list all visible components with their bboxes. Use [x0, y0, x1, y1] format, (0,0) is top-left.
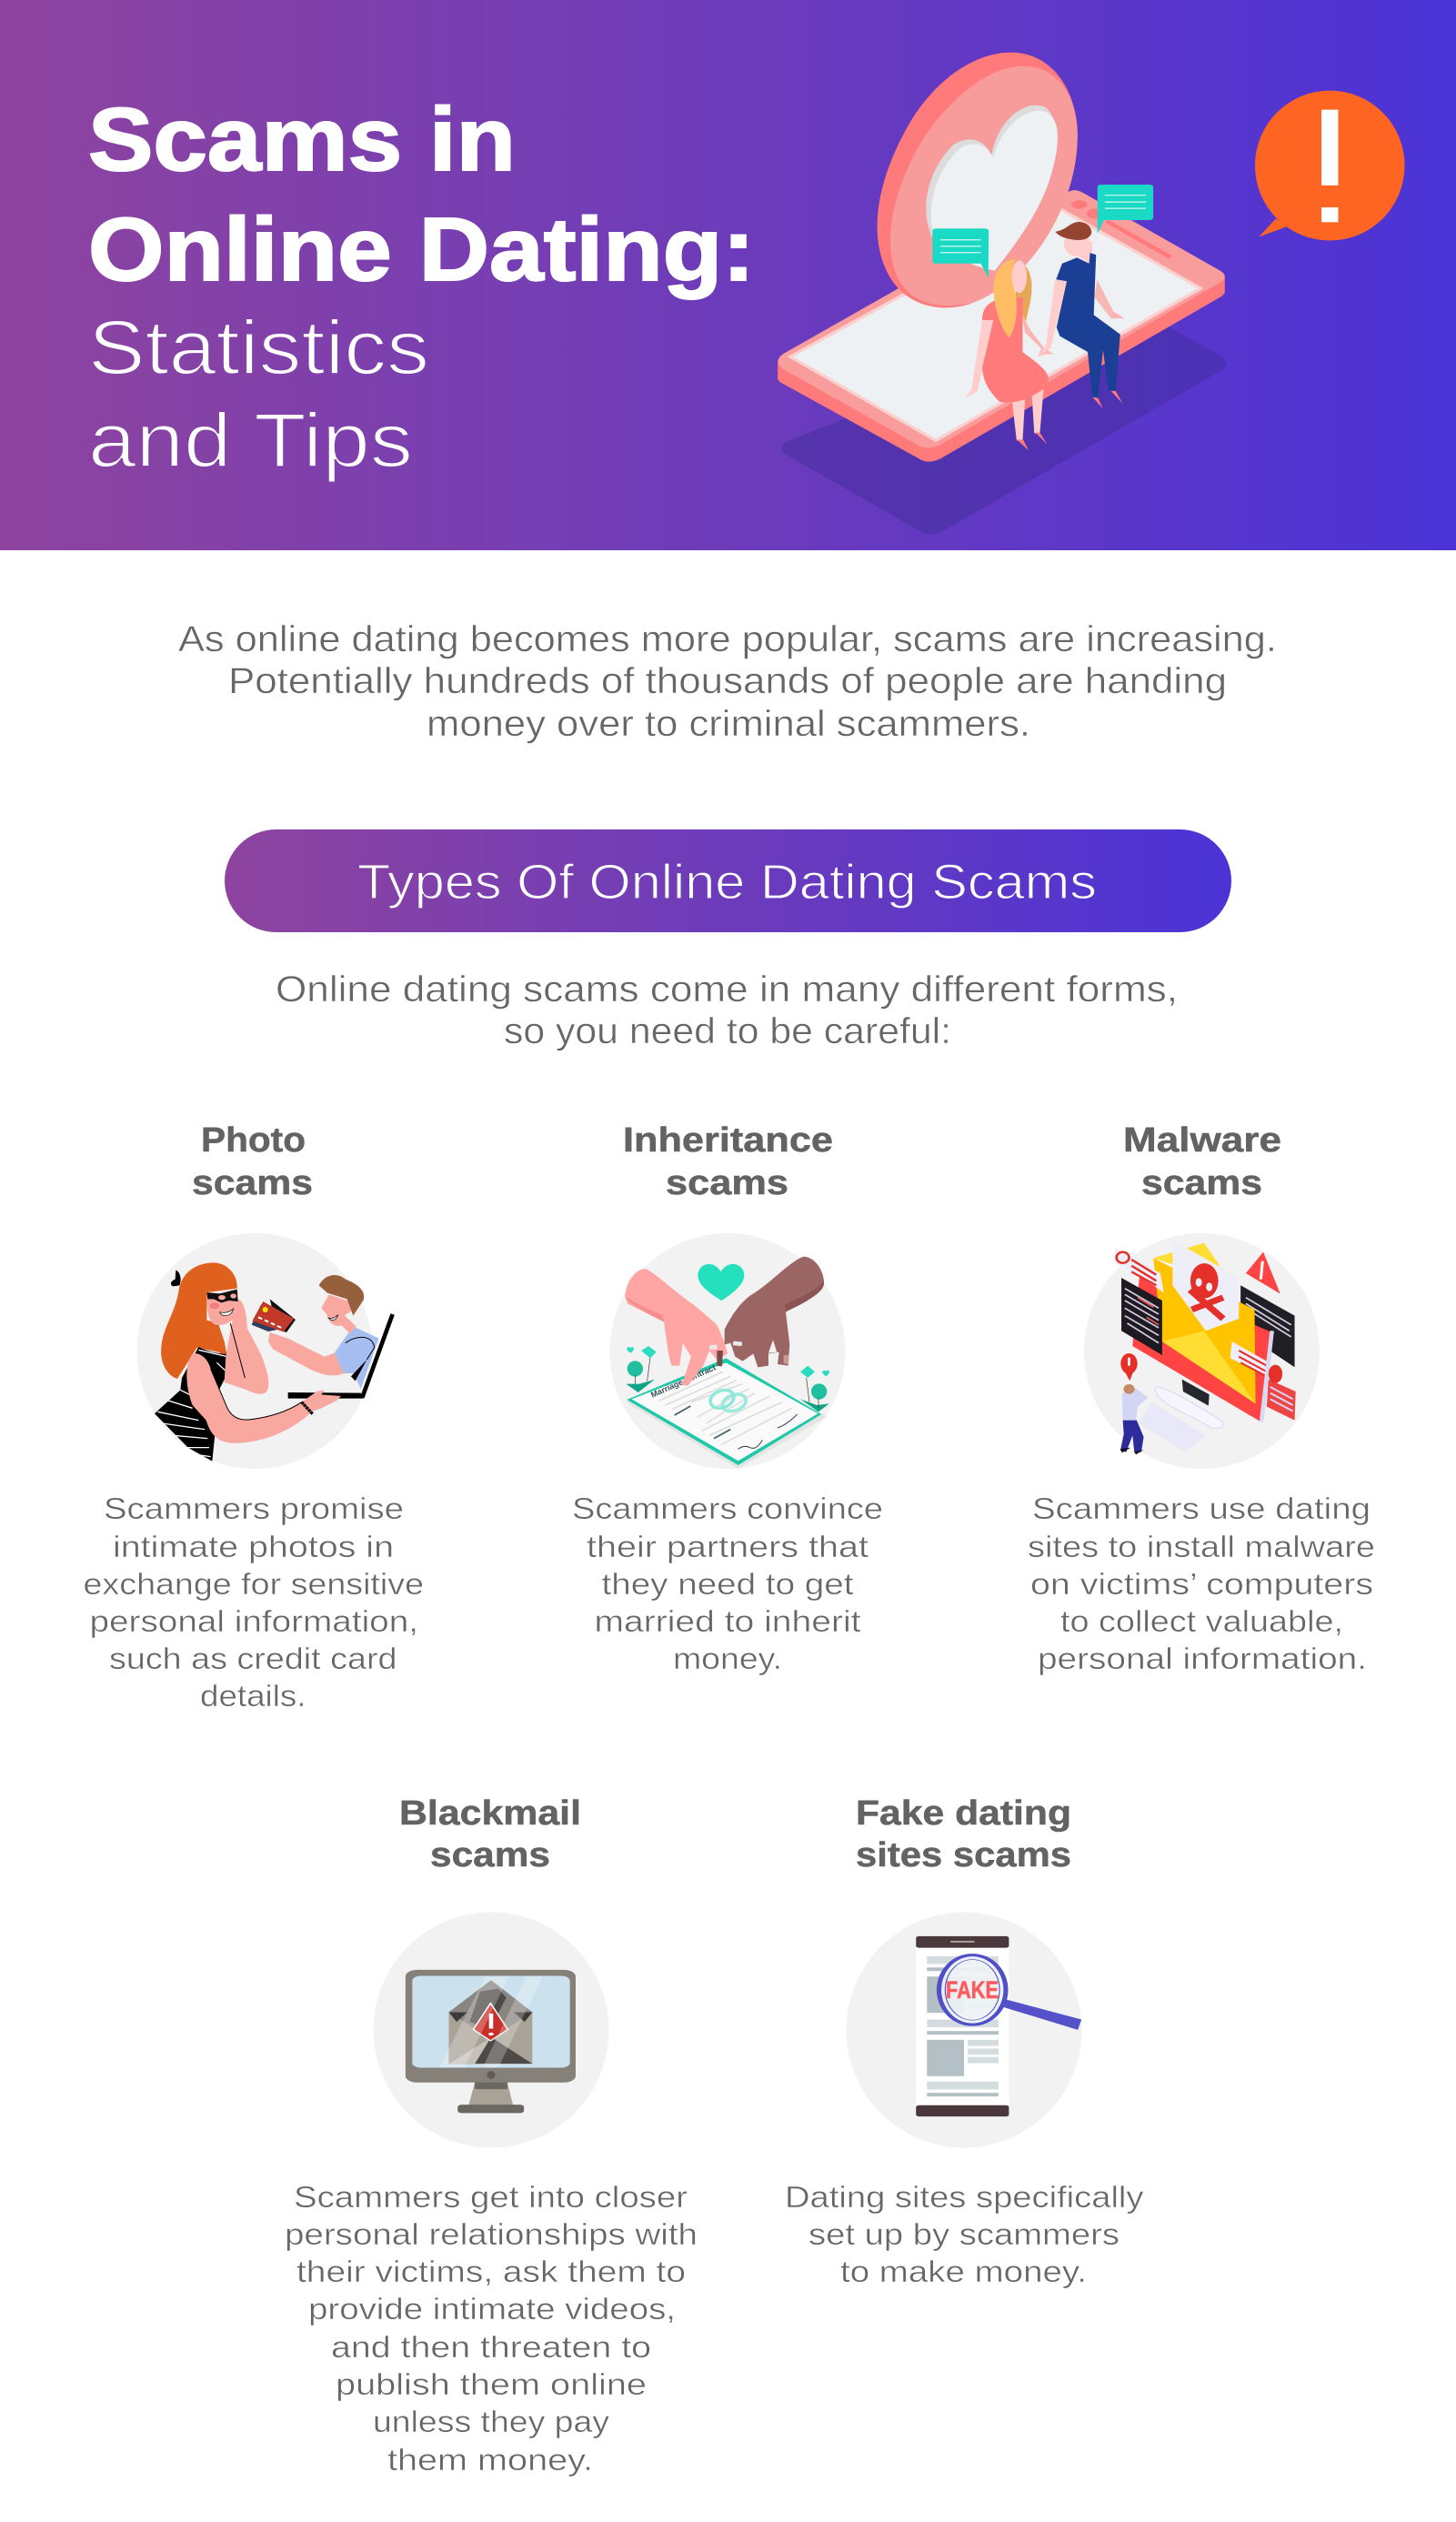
- title: [88, 89, 755, 483]
- text: malware scams description: Scammers use dating: [1032, 1492, 1371, 1525]
- panel: photo scams: [84, 1121, 424, 1713]
- text: malware scams description: to collect valuable,: [1060, 1604, 1343, 1638]
- text: photo scams description: personal information,: [89, 1604, 418, 1638]
- text: photo scams description: such as credit card: [109, 1642, 397, 1675]
- text: blackmail scams description: [285, 2180, 698, 2477]
- intro paragraph: [178, 619, 1277, 744]
- heading: blackmail scams: Blackmail: [399, 1794, 581, 1833]
- section intro text: Online dating scams come in many different forms,: [276, 970, 1178, 1010]
- section intro text: [276, 970, 1178, 1051]
- text: blackmail scams description: and then threaten to: [331, 2330, 651, 2364]
- text: inheritance scams description: married to inherit: [595, 1604, 860, 1638]
- header band: [0, 0, 1456, 550]
- text: malware scams description: sites to install malware: [1028, 1530, 1375, 1563]
- icon: monitor with warning envelope: [373, 1912, 609, 2148]
- text: blackmail scams description: their victims, ask them to: [296, 2255, 686, 2288]
- illustration: couple sitting on phone with heart bubble: [778, 53, 1227, 535]
- panel: blackmail scams: [285, 1794, 698, 2477]
- text: malware scams description: personal information.: [1038, 1642, 1367, 1675]
- panel: inheritance scams: [572, 1121, 883, 1675]
- heading: blackmail scams: scams: [430, 1836, 550, 1874]
- heading: fake dating sites scams: [856, 1794, 1071, 1874]
- section heading pill: [225, 829, 1231, 932]
- text: photo scams description: exchange for sensitive: [84, 1567, 424, 1601]
- intro paragraph: Potentially hundreds of thousands of people are handing: [228, 661, 1227, 701]
- text: blackmail scams description: provide intimate videos,: [308, 2292, 676, 2326]
- heading: inheritance scams: [623, 1121, 833, 1202]
- text: blackmail scams description: them money.: [387, 2443, 593, 2477]
- text: fake dating sites description: set up by scammers: [808, 2217, 1120, 2251]
- text: fake dating sites description: Dating sites specifically: [785, 2180, 1144, 2214]
- title: and Tips: [88, 397, 413, 483]
- icon: alert speech bubble: [1255, 91, 1405, 241]
- section heading pill: Types Of Online Dating Scams: [357, 855, 1097, 909]
- panel: fake dating sites scams: [785, 1794, 1144, 2288]
- text: inheritance scams description: their partners that: [587, 1530, 869, 1563]
- title: Online Dating:: [88, 199, 755, 299]
- text: photo scams description: Scammers promise: [104, 1492, 404, 1525]
- text: inheritance scams description: money.: [673, 1642, 782, 1675]
- heading: inheritance scams: scams: [666, 1164, 788, 1202]
- heading: photo scams: Photo: [201, 1121, 306, 1160]
- text: blackmail scams description: personal relationships with: [285, 2217, 698, 2251]
- text: inheritance scams description: [572, 1492, 883, 1675]
- icon: marriage contract and hands: [609, 1233, 846, 1469]
- heading: fake dating sites scams: Fake dating: [856, 1794, 1071, 1833]
- heading: malware scams: [1123, 1121, 1281, 1202]
- icon: malware envelope on monitor: [1084, 1233, 1320, 1469]
- text: blackmail scams description: unless they pay: [373, 2405, 610, 2438]
- text: blackmail scams description: Scammers get into closer: [294, 2180, 688, 2214]
- title: Scams in: [88, 89, 516, 189]
- heading: photo scams: [192, 1121, 313, 1202]
- heading: blackmail scams: [399, 1794, 581, 1874]
- intro paragraph: money over to criminal scammers.: [427, 704, 1030, 744]
- icon: marriage contract and hands: Marriage Contract: [649, 1362, 717, 1400]
- icon: phone with fake magnifier: [846, 1912, 1082, 2148]
- section intro text: so you need to be careful:: [504, 1011, 951, 1051]
- text: photo scams description: details.: [200, 1679, 306, 1713]
- text: photo scams description: intimate photos in: [113, 1530, 394, 1563]
- text: inheritance scams description: they need to get: [602, 1567, 853, 1601]
- icon: phone with fake magnifier: FAKE: [946, 1976, 999, 2004]
- title: Statistics: [88, 305, 429, 390]
- text: photo scams description: [84, 1492, 424, 1713]
- heading: inheritance scams: Inheritance: [623, 1121, 833, 1160]
- text: fake dating sites description: to make money.: [840, 2255, 1087, 2288]
- text: blackmail scams description: publish them online: [336, 2367, 647, 2401]
- heading: malware scams: scams: [1141, 1164, 1262, 1202]
- text: malware scams description: on victims’ computers: [1030, 1567, 1373, 1601]
- panel: malware scams: [1028, 1121, 1375, 1675]
- intro paragraph: As online dating becomes more popular, scams are increasing.: [178, 619, 1277, 659]
- heading: photo scams: scams: [192, 1164, 313, 1202]
- icon: photo scam illustration: [136, 1233, 393, 1469]
- heading: malware scams: Malware: [1123, 1121, 1281, 1160]
- text: fake dating sites description: [785, 2180, 1144, 2288]
- heading: fake dating sites scams: sites scams: [856, 1836, 1071, 1874]
- text: inheritance scams description: Scammers convince: [572, 1492, 883, 1525]
- text: malware scams description: [1028, 1492, 1375, 1675]
